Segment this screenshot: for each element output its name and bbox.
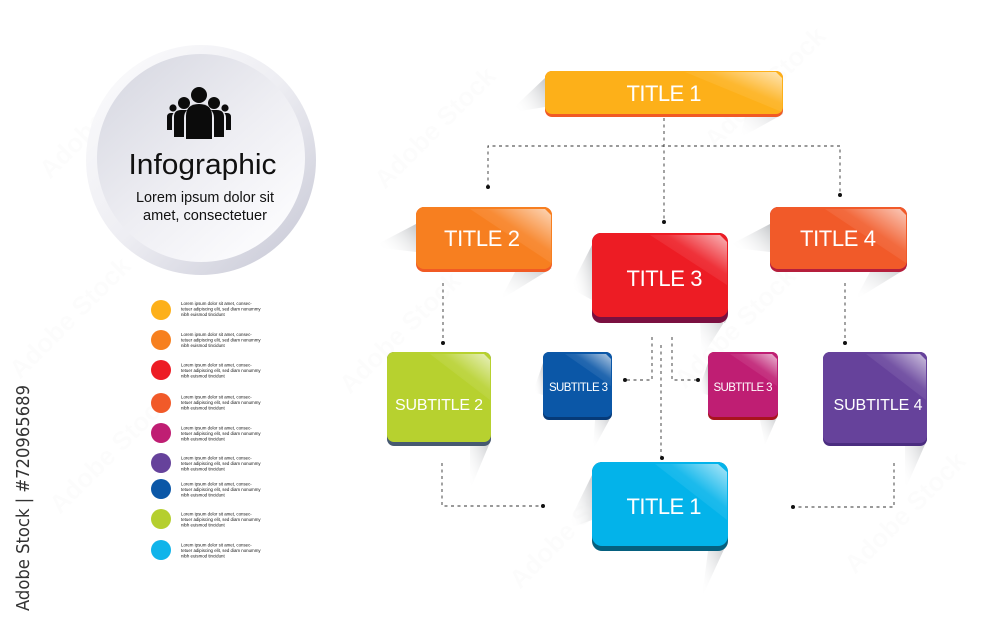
legend item 2: tetuer adipiscing elit, sed diam nonummy xyxy=(181,338,261,342)
box: bottom Title 1 xyxy=(565,462,728,597)
box: Title 3: TITLE 3 xyxy=(626,266,702,291)
legend item 7 xyxy=(151,479,261,499)
legend item 3: Lorem ipsum dolor sit amet, consec- xyxy=(181,362,252,368)
legend item 1: nibh euismod tincidunt xyxy=(181,312,225,317)
legend xyxy=(151,300,261,560)
legend item 9: tetuer adipiscing elit, sed diam nonummy xyxy=(181,548,261,553)
legend item 3 xyxy=(151,360,261,380)
heading: Infographic: Infographic xyxy=(128,149,276,181)
box: Title 4: TITLE 4 xyxy=(800,226,876,251)
legend item 8: tetuer adipiscing elit, sed diam nonummy xyxy=(181,517,261,522)
box: top Title 1 xyxy=(508,71,783,138)
legend item 4: nibh euismod tincidunt xyxy=(181,406,225,410)
legend item 8: Lorem ipsum dolor sit amet, consec- xyxy=(181,512,252,516)
box: bottom Title 1: TITLE 1 xyxy=(626,494,702,519)
box: Subtitle 3 pink xyxy=(698,352,778,445)
faint watermark: Adobe Stock xyxy=(333,265,467,399)
faint watermark: Adobe Stock xyxy=(3,250,137,384)
legend item 5 xyxy=(151,423,261,443)
legend item 6: nibh euismod tincidunt xyxy=(181,466,225,472)
legend item 1: tetuer adipiscing elit, sed diam nonummy xyxy=(181,306,261,312)
legend item 4 xyxy=(151,393,261,413)
faint watermark: Adobe Stock xyxy=(668,260,802,394)
box: Subtitle 4: SUBTITLE 4 xyxy=(834,397,923,414)
faint watermark: Adobe Stock xyxy=(43,385,177,519)
legend item 5: nibh euismod tincidunt xyxy=(181,436,225,442)
legend item 7: nibh euismod tincidunt xyxy=(181,492,225,498)
stock id vertical text: Adobe Stock | #720965689 xyxy=(13,385,34,611)
legend item 1: Lorem ipsum dolor sit amet, consec- xyxy=(181,301,252,306)
faint watermark: Adobe Stock xyxy=(368,60,502,194)
legend item 8: nibh euismod tincidunt xyxy=(181,522,225,528)
faint watermark: Adobe Stock xyxy=(698,20,832,154)
text: description xyxy=(136,190,274,224)
info circle panel xyxy=(86,45,316,275)
box: Subtitle 4 xyxy=(823,352,927,490)
legend item 6: tetuer adipiscing elit, sed diam nonummy xyxy=(181,461,261,466)
legend item 5: tetuer adipiscing elit, sed diam nonummy xyxy=(181,431,261,436)
legend item 6: Lorem ipsum dolor sit amet, consec- xyxy=(181,456,252,460)
legend item 4: tetuer adipiscing elit, sed diam nonummy xyxy=(181,400,261,405)
legend item 2 xyxy=(151,330,261,350)
box: Title 4 xyxy=(726,207,907,300)
box: top Title 1: TITLE 1 xyxy=(626,81,702,106)
legend item 3: tetuer adipiscing elit, sed diam nonummy xyxy=(181,368,261,373)
legend item 5: Lorem ipsum dolor sit amet, consec- xyxy=(181,426,252,430)
box: Title 2: TITLE 2 xyxy=(444,226,520,251)
box: Title 2 xyxy=(372,207,552,300)
box: Subtitle 2 xyxy=(387,352,491,490)
legend item 6 xyxy=(151,453,261,473)
legend item 7: Lorem ipsum dolor sit amet, consec- xyxy=(181,482,252,486)
text: description: Lorem ipsum dolor sit xyxy=(136,190,274,206)
box: Subtitle 2: SUBTITLE 2 xyxy=(395,397,483,414)
box: Subtitle 3 blue: SUBTITLE 3 xyxy=(549,382,608,394)
legend item 1 xyxy=(151,300,261,320)
legend item 4: Lorem ipsum dolor sit amet, consec- xyxy=(181,394,252,400)
legend item 9 xyxy=(151,540,261,560)
faint watermark: Adobe Stock xyxy=(503,460,637,594)
connector lines xyxy=(441,118,894,509)
text: description: amet, consectetuer xyxy=(143,208,267,224)
faint watermark: Adobe Stock xyxy=(838,445,972,579)
box: Title 3 xyxy=(570,233,728,357)
box: Subtitle 3 pink: SUBTITLE 3 xyxy=(714,382,772,394)
legend item 8 xyxy=(151,509,261,529)
legend item 9: nibh euismod tincidunt xyxy=(181,554,225,558)
icon: group of people xyxy=(167,87,231,139)
legend item 9: Lorem ipsum dolor sit amet, consec- xyxy=(181,542,252,548)
legend item 2: nibh euismod tincidunt xyxy=(181,343,225,348)
legend item 3: nibh euismod tincidunt xyxy=(181,374,225,378)
legend item 2: Lorem ipsum dolor sit amet, consec- xyxy=(181,332,252,337)
faint watermark: Adobe Stock xyxy=(33,50,167,184)
legend item 7: tetuer adipiscing elit, sed diam nonummy xyxy=(181,487,261,492)
box: Subtitle 3 blue xyxy=(533,352,612,450)
